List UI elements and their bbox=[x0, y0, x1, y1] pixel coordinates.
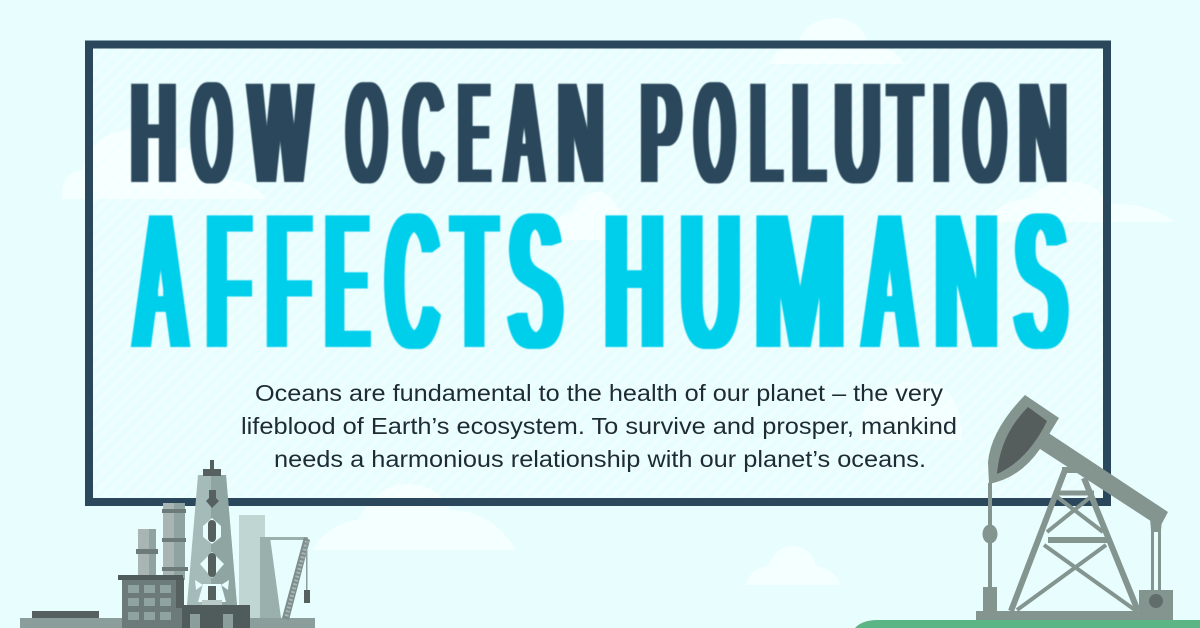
title line 2: A bbox=[862, 170, 917, 393]
title line 2: F bbox=[207, 170, 250, 393]
title line 1: N bbox=[558, 49, 604, 216]
title line 2: U bbox=[681, 170, 740, 393]
title line 2: S bbox=[1015, 170, 1067, 393]
title line 2: E bbox=[326, 170, 369, 393]
title line 2: T bbox=[453, 170, 495, 393]
main factory building bbox=[118, 575, 184, 628]
title line 1: O bbox=[695, 49, 734, 216]
title line 2: H bbox=[605, 170, 664, 393]
title line 1: N bbox=[1019, 49, 1067, 216]
title line 1: O bbox=[347, 49, 386, 216]
polished rod bbox=[982, 483, 998, 612]
intro paragraph: Oceans are fundamental to the health of our planet – the very bbox=[255, 380, 943, 406]
pitman arm bbox=[1150, 518, 1162, 592]
title line 2: C bbox=[386, 170, 439, 393]
icon: refinery and factory bbox=[20, 460, 315, 628]
intro paragraph bbox=[241, 380, 957, 472]
title line 1: O bbox=[192, 49, 231, 216]
title line 1: W bbox=[249, 49, 311, 216]
title line 1: U bbox=[834, 49, 880, 216]
title line 2: N bbox=[935, 170, 999, 393]
title line 1: I bbox=[934, 49, 949, 216]
title line 2: S bbox=[509, 170, 562, 393]
title line 2: M bbox=[754, 170, 846, 393]
chimney 2 bbox=[162, 503, 188, 580]
title line 2: A bbox=[133, 170, 188, 393]
title line 1: C bbox=[404, 49, 443, 216]
icon: oil pump jack bbox=[976, 395, 1173, 620]
gear box bbox=[1139, 590, 1173, 612]
pale tower bbox=[239, 515, 265, 618]
title line 1: T bbox=[889, 49, 921, 216]
panel: title frame bbox=[89, 44, 1107, 502]
derrick tower bbox=[187, 460, 237, 605]
title line 1: H bbox=[131, 49, 177, 216]
chimney 1 bbox=[136, 529, 158, 576]
intro paragraph: needs a harmonious relationship with our planet’s oceans. bbox=[274, 446, 926, 472]
title line 1: E bbox=[459, 49, 489, 216]
front building bbox=[182, 605, 250, 628]
derrick frame bbox=[1011, 470, 1138, 611]
base bbox=[976, 611, 1173, 620]
title line 2 bbox=[130, 170, 1070, 393]
horse head bbox=[988, 395, 1059, 484]
title line 1: O bbox=[964, 49, 1005, 216]
title line 1: A bbox=[504, 49, 544, 216]
intro paragraph: lifeblood of Earth’s ecosystem. To survive and prosper, mankind bbox=[241, 413, 957, 439]
crane bbox=[267, 537, 310, 620]
title line 1 bbox=[130, 49, 1068, 216]
title line 1: L bbox=[793, 49, 825, 216]
title line 2: F bbox=[267, 170, 310, 393]
title line 1: P bbox=[641, 49, 680, 216]
ground: green hill bbox=[855, 620, 1200, 628]
title line 1: L bbox=[751, 49, 781, 216]
walking beam bbox=[1040, 432, 1168, 527]
